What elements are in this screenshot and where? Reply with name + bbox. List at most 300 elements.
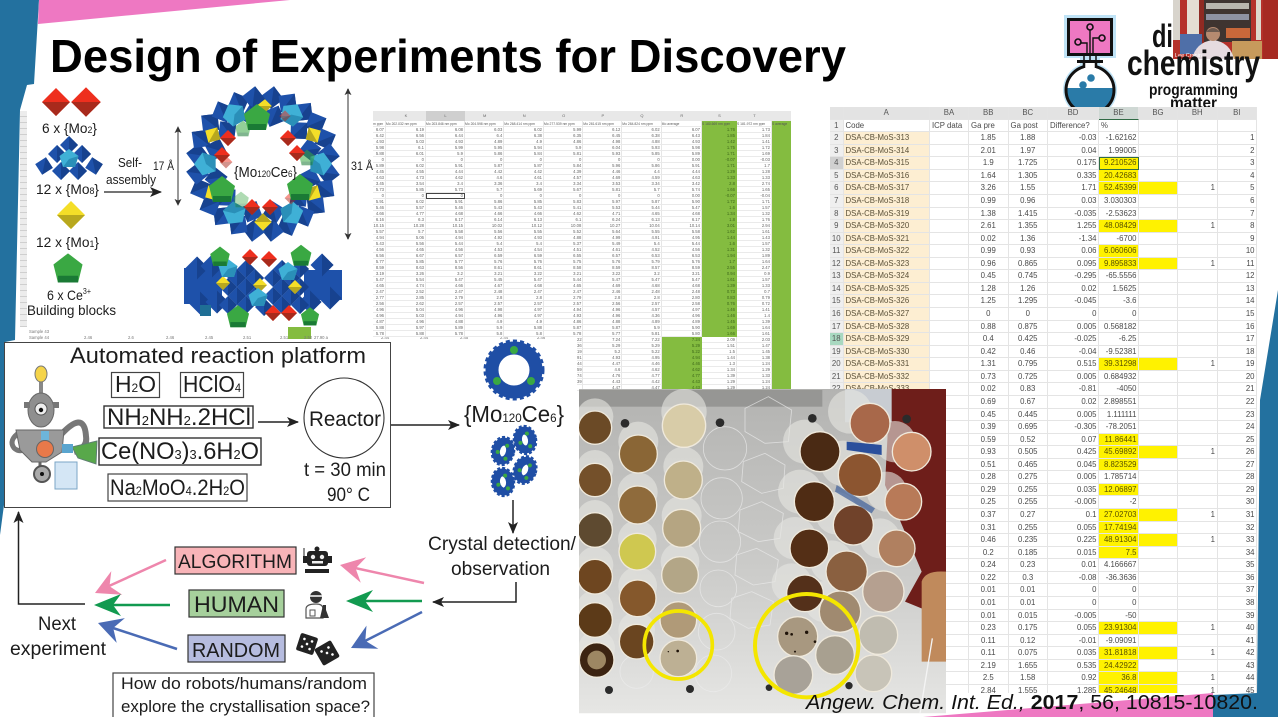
right spreadsheet: Ga pre and post data: 1.26: [1020, 284, 1035, 293]
middle spreadsheet: ppm data: 4.94: [376, 235, 384, 240]
right spreadsheet: Ga pre and post data: 1.85: [981, 133, 996, 142]
middle spreadsheet: ppm data: 6.19: [416, 127, 424, 132]
icon: human scientist: [306, 591, 329, 618]
middle spreadsheet: ppm data: 6.59: [534, 253, 542, 258]
right spreadsheet: Ga pre and post data: -0.005: [1074, 610, 1096, 620]
middle spreadsheet: ppm data: 1.71: [727, 163, 735, 168]
middle spreadsheet: ppm data: 4.77: [416, 211, 424, 216]
middle spreadsheet: ppm data: 1.85: [727, 133, 735, 138]
middle spreadsheet: continuation rows: 7.22: [652, 337, 660, 342]
middle spreadsheet: ppm data: 2.57: [534, 301, 542, 306]
right spreadsheet: Ga pre and post data: 0.22: [981, 573, 996, 582]
middle spreadsheet: ppm data: 0: [500, 157, 502, 162]
middle spreadsheet: ppm data: 5.46: [455, 205, 463, 210]
middle spreadsheet column letters: S: [718, 113, 721, 118]
right spreadsheet: Ga pre and post data: 8.823529: [1104, 460, 1136, 469]
right spreadsheet: Ga pre and post data: Ga pre: [971, 121, 995, 130]
middle spreadsheet: ppm data: 4.57: [652, 307, 660, 312]
right spreadsheet: Ga pre and post data: Code: [846, 121, 864, 130]
middle spreadsheet: ppm data: 4.97: [534, 307, 542, 312]
middle spreadsheet: ppm data: 5.78: [455, 331, 463, 336]
middle spreadsheet: continuation rows: 1.29: [727, 385, 735, 390]
middle spreadsheet: ppm data: 4.56: [376, 247, 384, 252]
middle spreadsheet: ppm data: 4.9: [536, 319, 542, 324]
building block: Mo8: [33, 136, 105, 197]
reactor: Reactor: [309, 408, 381, 431]
middle spreadsheet: ppm data: 5.4: [654, 241, 660, 246]
middle spreadsheet: ppm data: 6.56: [416, 133, 424, 138]
middle spreadsheet: ppm data: 2.8: [654, 295, 660, 300]
middle spreadsheet: ppm data: 1.46: [727, 307, 735, 312]
right spreadsheet: Ga pre and post data: 0.005: [1077, 472, 1096, 481]
right spreadsheet: Ga pre and post data: 0.01: [981, 585, 996, 594]
middle spreadsheet: ppm data: -0.03: [760, 157, 770, 162]
middle spreadsheet: ppm data: 5.73: [376, 187, 384, 192]
middle spreadsheet: ppm data: 6.38: [534, 133, 542, 138]
right spreadsheet: Ga pre and post data: 25: [1246, 435, 1254, 444]
middle spreadsheet: ppm data: 0: [540, 193, 542, 198]
right spreadsheet: Ga pre and post data: 4: [1250, 171, 1254, 180]
middle spreadsheet: ppm data: 4.88: [612, 319, 620, 324]
middle spreadsheet: ppm data: 4.42: [494, 169, 502, 174]
middle spreadsheet: continuation rows: 4.76: [612, 373, 620, 378]
right spreadsheet: Ga pre and post data: DSA-CB-MoS-321: [846, 234, 909, 243]
right spreadsheet: Ga pre and post data: 24: [1246, 422, 1254, 431]
middle spreadsheet: ppm data: 5.81: [652, 331, 660, 336]
middle spreadsheet: ppm data: 5.06: [416, 235, 424, 240]
middle spreadsheet: ppm data: 4.65: [376, 283, 384, 288]
middle spreadsheet: ppm data: 4.95: [692, 235, 700, 240]
middle spreadsheet: ppm data: 3.21: [692, 271, 700, 276]
right spreadsheet: Ga pre and post data: DSA-CB-MoS-314: [846, 146, 909, 155]
right spreadsheet: Ga pre and post data: 0.88: [981, 322, 996, 331]
product formula: {Mo120Ce6}: [464, 401, 564, 427]
right spreadsheet: Ga pre and post data: 0.93: [1020, 246, 1035, 255]
right spreadsheet: Ga pre and post data: 13: [1246, 284, 1254, 293]
middle spreadsheet: ppm data: 4.42: [534, 169, 542, 174]
middle spreadsheet: continuation rows: 5.2: [614, 349, 620, 354]
right spreadsheet: Ga pre and post data: 0: [1132, 585, 1136, 594]
middle spreadsheet: continuation rows: 4.47: [612, 385, 620, 390]
left spreadsheet bottom rows: 27.90 a: [314, 335, 328, 340]
middle spreadsheet: ppm data: 4.46: [612, 169, 620, 174]
middle spreadsheet: ppm data: 5.58: [455, 229, 463, 234]
middle spreadsheet: continuation rows: 4.93: [612, 355, 620, 360]
middle spreadsheet: ppm data: 2.58: [692, 301, 700, 306]
middle spreadsheet: ppm data: 6.16: [376, 217, 384, 222]
middle spreadsheet: ppm data: 0: [579, 157, 581, 162]
middle spreadsheet: ppm data: 4.36: [652, 313, 660, 318]
right spreadsheet: Ga pre and post data: 2.61: [981, 221, 996, 230]
left spreadsheet bottom rows: 2.51: [243, 335, 251, 340]
middle spreadsheet: ppm data: 1.57: [762, 277, 770, 282]
middle spreadsheet: continuation rows: 1.45: [762, 349, 770, 354]
right spreadsheet: Ga pre and post data: 36.8: [1121, 673, 1136, 682]
right spreadsheet: Ga pre and post data: 0.875: [1018, 322, 1038, 331]
right spreadsheet: Ga pre and post data: 0.055: [1077, 523, 1096, 532]
reagent: cerium nitrate: Ce(NO3)3.6H2O: [101, 438, 259, 465]
reagent: sodium molybdate: Na2MoO4.2H2O: [110, 475, 245, 500]
middle spreadsheet: ppm data: 5.47: [692, 277, 700, 282]
right spreadsheet: Ga pre and post data: 5: [1250, 183, 1254, 192]
right spreadsheet: Ga pre and post data: %: [1101, 121, 1108, 130]
left spreadsheet bottom rows: [18, 327, 578, 340]
middle spreadsheet: ppm data: 5.97: [612, 199, 620, 204]
middle spreadsheet: ppm data: 5.7: [496, 187, 502, 192]
right spreadsheet: Ga pre and post data: 1.25: [981, 296, 996, 305]
right spreadsheet: Ga pre and post data: 0: [1092, 309, 1096, 318]
middle spreadsheet: ppm data: 1.39: [727, 283, 735, 288]
arrow: reagents to reactor: [258, 421, 298, 423]
middle spreadsheet: ppm data: 5.47: [534, 277, 542, 282]
right spreadsheet: Ga pre and post data: 16: [832, 309, 841, 318]
right spreadsheet: Ga pre and post data: 0: [1092, 598, 1096, 607]
right spreadsheet: Ga pre and post data: 0.92: [1081, 673, 1096, 682]
right spreadsheet: Ga pre and post data: -0.005: [1074, 497, 1096, 506]
decision maker: human: HUMAN: [194, 592, 279, 617]
middle spreadsheet: ppm data: 5.9: [496, 325, 502, 330]
right spreadsheet: Ga pre and post data: 17: [832, 322, 841, 331]
right spreadsheet: Ga pre and post data: 19: [1246, 359, 1254, 368]
middle spreadsheet: ppm data: 2.46: [612, 289, 620, 294]
middle spreadsheet: ppm data: 4.94: [455, 313, 463, 318]
middle spreadsheet: ppm data: 10.02: [492, 223, 502, 228]
middle spreadsheet: ppm data: 6.55: [573, 253, 581, 258]
research question box: explore the crystallisation space?: [121, 698, 370, 716]
right spreadsheet: Ga pre and post data: 0.51: [981, 460, 996, 469]
middle spreadsheet: ppm data: 1.72: [762, 145, 770, 150]
right spreadsheet: Ga pre and post data: DSA-CB-MoS-330: [846, 347, 909, 356]
middle spreadsheet: ppm data: 6.1: [575, 217, 581, 222]
right spreadsheet: Ga pre and post data: 0.02: [1081, 397, 1096, 406]
middle spreadsheet: ppm data: 4.44: [455, 169, 463, 174]
middle spreadsheet: ppm data: 2.48: [494, 289, 502, 294]
middle spreadsheet: ppm data: 5.90: [692, 199, 700, 204]
middle spreadsheet: ppm data: 2.55: [727, 265, 735, 270]
right spreadsheet: Ga pre and post data: -6700: [1117, 234, 1136, 243]
middle spreadsheet: continuation rows: 44: [577, 361, 582, 366]
middle spreadsheet: ppm data: 4.93: [573, 313, 581, 318]
middle spreadsheet: ppm data: 4.87: [376, 319, 384, 324]
middle spreadsheet: ppm data: 5.91: [376, 199, 384, 204]
right spreadsheet: Ga pre and post data: BC: [1022, 108, 1033, 117]
middle spreadsheet: ppm data: 5.55: [652, 229, 660, 234]
middle spreadsheet: ppm data: 5.98: [376, 145, 384, 150]
middle spreadsheet: ppm data: 5.89: [692, 151, 700, 156]
middle spreadsheet: ppm data: 4.61: [612, 247, 620, 252]
middle spreadsheet: ppm data: 0: [657, 157, 660, 162]
middle spreadsheet: ppm data: 5.87: [534, 163, 542, 168]
middle spreadsheet: ppm data: 4.86: [573, 139, 581, 144]
middle spreadsheet: ppm data: 5.86: [494, 151, 502, 156]
middle spreadsheet: ppm data: 5.56: [494, 229, 502, 234]
middle spreadsheet: ppm data: 1.66: [727, 331, 735, 336]
right spreadsheet: Ga pre and post data: 16: [1246, 322, 1254, 331]
right spreadsheet: Ga pre and post data: [830, 107, 1257, 693]
middle spreadsheet: ppm data: 4.96: [612, 313, 620, 318]
right spreadsheet: Ga pre and post data: 1: [1211, 359, 1215, 368]
middle spreadsheet: ppm data: 2.8: [536, 295, 542, 300]
right spreadsheet: Ga pre and post data: 27.02703: [1104, 510, 1136, 519]
citation: Angew. Chem. Int. Ed., 2017, 56, 10815-10820.: [805, 692, 1258, 714]
middle spreadsheet: ppm data: 5.43: [376, 241, 384, 246]
middle spreadsheet: ppm data: Mo 281.615 nm ppm: [583, 122, 614, 126]
right spreadsheet: Ga pre and post data: 2.5: [983, 673, 994, 682]
middle spreadsheet: ppm data: 4.96: [612, 307, 620, 312]
middle spreadsheet: ppm data: 6.03: [494, 127, 502, 132]
building block: Ce: 3+: [83, 287, 91, 296]
middle spreadsheet: ppm data: 4.66: [455, 283, 463, 288]
middle spreadsheet: ppm data: 4.39: [573, 169, 581, 174]
middle spreadsheet: continuation rows: 19: [577, 349, 582, 354]
arrow: reactor to product: [391, 424, 459, 426]
next experiment label: experiment: [10, 639, 107, 660]
middle spreadsheet: ppm data: 4.65: [652, 211, 660, 216]
middle spreadsheet: ppm data: 1.45: [727, 319, 735, 324]
right spreadsheet: Ga pre and post data: 1.55: [1020, 183, 1035, 192]
top pink band: [38, 0, 290, 24]
right spreadsheet: Ga pre and post data: DSA-CB-MoS-318: [846, 196, 909, 205]
right spreadsheet: Ga pre and post data: 8: [834, 208, 838, 218]
middle spreadsheet: ppm data: 4.54: [534, 247, 542, 252]
middle spreadsheet: ppm data: 1.71: [762, 199, 770, 204]
right spreadsheet: Ga pre and post data: 2: [1250, 146, 1254, 155]
middle spreadsheet column letters: M: [483, 113, 486, 118]
middle spreadsheet: ppm data: 1.29: [727, 169, 735, 174]
middle spreadsheet: ppm data: 5.76: [612, 259, 620, 264]
middle spreadsheet: ppm data: 3.22: [534, 271, 542, 276]
vial glass bodies: [579, 389, 913, 638]
reagent: H2O: H2O: [115, 371, 156, 397]
middle spreadsheet: ppm data: 5.94: [534, 145, 542, 150]
middle spreadsheet: ppm data: 3.34: [652, 181, 660, 186]
product ring small: [486, 342, 542, 398]
right spreadsheet: Ga pre and post data: -0.03: [1079, 133, 1096, 142]
right spreadsheet: Ga pre and post data: Difference?: [1050, 121, 1090, 130]
middle spreadsheet: ppm data: 5.4: [536, 241, 542, 246]
middle spreadsheet: ppm data: 5.74: [692, 187, 700, 192]
right spreadsheet: Ga pre and post data: 0.1: [1086, 510, 1096, 519]
right spreadsheet: Ga pre and post data: 1.355: [1018, 221, 1038, 230]
right spreadsheet: Ga pre and post data: 1.725: [1018, 158, 1038, 167]
panel: automated reaction platform: [4, 342, 390, 508]
right spreadsheet: Ga pre and post data: 0.175: [1077, 158, 1096, 167]
right spreadsheet: Ga pre and post data: 3: [1250, 158, 1254, 167]
middle spreadsheet: ppm data: 4.53: [494, 247, 502, 252]
middle spreadsheet: ppm data: 5.83: [573, 199, 581, 204]
middle spreadsheet: ppm data: Mo average: [662, 122, 679, 126]
middle spreadsheet: ppm data: 2.80: [692, 295, 700, 300]
building block: Mo1: [36, 201, 99, 250]
right spreadsheet: Ga pre and post data: 0.425: [1018, 334, 1038, 343]
logo text: matter: [1170, 95, 1217, 112]
middle spreadsheet: ppm data: 8.63: [416, 265, 424, 270]
right spreadsheet: Ga pre and post data: 0.24: [981, 560, 996, 569]
right spreadsheet: Ga pre and post data: 0.175: [1018, 623, 1038, 632]
right spreadsheet: Ga pre and post data: -0.81: [1079, 384, 1096, 393]
right spreadsheet: Ga pre and post data: 0.795: [1018, 359, 1038, 368]
middle spreadsheet: ppm data: 3.54: [416, 181, 424, 186]
middle spreadsheet: ppm data: 1.57: [762, 241, 770, 246]
right spreadsheet: Ga pre and post data: 1.64: [981, 171, 996, 180]
middle spreadsheet: ppm data: 8.59: [376, 265, 384, 270]
right spreadsheet: Ga pre and post data: 0.005: [1077, 410, 1096, 418]
left spreadsheet bottom rows: Sample 43: [29, 329, 49, 334]
middle spreadsheet: ppm data: 4.71: [612, 211, 620, 216]
middle spreadsheet: ppm data: 5.78: [573, 331, 581, 336]
middle spreadsheet: ppm data: 4.97: [534, 313, 542, 318]
middle spreadsheet: ppm data: 2.47: [573, 289, 581, 294]
middle spreadsheet: ppm data: 1.6: [729, 241, 735, 246]
crystals cluster: [489, 424, 540, 497]
icon: dice: [296, 633, 340, 666]
right spreadsheet: Ga pre and post data: 39: [1246, 610, 1254, 620]
left spreadsheet bottom rows: Sample 44: [29, 335, 49, 340]
right spreadsheet: Ga pre and post data: 15: [1246, 309, 1254, 318]
middle spreadsheet: ppm data: 6.44: [455, 133, 463, 138]
middle spreadsheet: continuation rows: 4.47: [652, 385, 660, 390]
right spreadsheet: Ga pre and post data: 1.28: [981, 284, 996, 293]
middle spreadsheet: ppm data: 1.28: [762, 169, 770, 174]
right spreadsheet: Ga pre and post data: 1: [1250, 133, 1254, 142]
middle spreadsheet: ppm data: 2.56: [612, 301, 620, 306]
middle spreadsheet: ppm data: 6.56: [376, 253, 384, 258]
right spreadsheet: Ga pre and post data: 48.91304: [1104, 535, 1136, 544]
middle spreadsheet: ppm data: 3.01: [727, 223, 735, 228]
middle spreadsheet: ppm data: 1.41: [762, 139, 770, 144]
left blue band: [0, 0, 39, 535]
middle spreadsheet: continuation rows: 1.38: [762, 355, 770, 360]
right spreadsheet: Ga pre and post data: 3: [834, 146, 838, 155]
right spreadsheet: Ga pre and post data: 0.225: [1077, 535, 1096, 544]
middle spreadsheet: ppm data: 5.57: [416, 205, 424, 210]
right spreadsheet: Ga pre and post data: DSA-CB-MoS-324: [846, 271, 909, 280]
right spreadsheet: Ga pre and post data: 0.725: [1018, 372, 1038, 381]
right spreadsheet: Ga pre and post data: 38: [1246, 598, 1254, 607]
middle spreadsheet column letters: T: [753, 113, 756, 118]
middle spreadsheet: ppm data: Mo 268.414 nm ppm: [504, 122, 535, 126]
right spreadsheet: Ga pre and post data: 6.060606: [1104, 246, 1136, 255]
middle spreadsheet: continuation rows: 1.47: [762, 343, 770, 348]
middle spreadsheet: ppm data: 5.9: [575, 145, 581, 150]
right spreadsheet: Ga pre and post data: 48.08429: [1104, 221, 1136, 230]
arrow: green incoming: [346, 590, 422, 612]
middle spreadsheet: ppm data: 4.96: [416, 319, 424, 324]
middle spreadsheet: ppm data: 0: [422, 157, 424, 162]
right spreadsheet: Ga pre and post data: -0.08: [1079, 573, 1096, 582]
right spreadsheet: Ga pre and post data: 0.46: [1020, 347, 1035, 356]
right spreadsheet: Ga pre and post data: 0.46: [981, 535, 996, 544]
middle spreadsheet: ppm data: 5.76: [494, 259, 502, 264]
middle spreadsheet: ppm data: 0: [500, 193, 502, 198]
middle spreadsheet: ppm data: 1.33: [727, 175, 735, 180]
middle spreadsheet: ppm data: 5.85: [416, 187, 424, 192]
middle spreadsheet: continuation rows: 1.44: [727, 355, 735, 360]
middle spreadsheet: ppm data: 6.67: [416, 253, 424, 258]
right spreadsheet: Ga pre and post data: 13: [832, 271, 841, 280]
middle spreadsheet: ppm data: 4.56: [692, 247, 700, 252]
right spreadsheet: Ga pre and post data: 0.27: [1020, 510, 1035, 519]
middle spreadsheet: ppm data: 3.45: [376, 181, 384, 186]
middle spreadsheet: continuation rows: 1.3: [729, 361, 735, 366]
right spreadsheet: Ga pre and post data: 0.005: [1077, 322, 1096, 331]
right spreadsheet: Ga pre and post data: 0.01: [981, 598, 996, 607]
middle spreadsheet: ppm data: 2.79: [573, 295, 581, 300]
right spreadsheet: Ga pre and post data: 2: [834, 133, 838, 142]
middle spreadsheet: ppm data: 4.9: [536, 139, 542, 144]
right spreadsheet: Ga pre and post data: -0.035: [1074, 208, 1096, 218]
middle spreadsheet: ppm data: 1.69: [762, 151, 770, 156]
middle spreadsheet: ppm data: 0: [422, 193, 424, 198]
elbow arrow: detection to decision: [433, 582, 516, 602]
middle spreadsheet: ppm data: 6.57: [612, 253, 620, 258]
middle spreadsheet: ppm data: 1.32: [762, 247, 770, 252]
middle spreadsheet: ppm data: 6.59: [494, 253, 502, 258]
right spreadsheet: Ga pre and post data: 0.035: [1077, 648, 1096, 657]
middle spreadsheet: ppm data: 5.87: [573, 325, 581, 330]
middle spreadsheet: ppm data: 1.64: [762, 259, 770, 264]
middle spreadsheet: ppm data: 4.96: [455, 307, 463, 312]
middle spreadsheet: ppm data: 1.73: [762, 127, 770, 132]
right spreadsheet: Ga pre and post data: 1.785714: [1104, 472, 1136, 481]
logo text: di: [1152, 18, 1173, 54]
middle spreadsheet: ppm data: 1.61: [762, 229, 770, 234]
right spreadsheet: Ga pre and post data: -50: [1125, 610, 1136, 620]
middle spreadsheet: ppm data: S 181.972 nm ppm: [737, 122, 765, 126]
dimension: 17 angstrom: [153, 127, 178, 205]
right spreadsheet: Ga pre and post data: 1.99005: [1108, 146, 1136, 155]
middle spreadsheet: continuation rows: 22: [577, 337, 582, 342]
middle spreadsheet: ppm data: 1.76: [762, 217, 770, 222]
middle spreadsheet: ppm data: 4.94: [573, 307, 581, 312]
right spreadsheet: Ga pre and post data: 2.01: [981, 146, 996, 155]
middle spreadsheet: ppm data: 1.8: [729, 217, 735, 222]
building block: Mo2: 6 x {Mo2}: [42, 120, 97, 136]
middle spreadsheet: ppm data: 2.47: [534, 289, 542, 294]
middle spreadsheet: ppm data: 5.54: [416, 277, 424, 282]
middle spreadsheet: ppm data: 5.41: [573, 205, 581, 210]
middle spreadsheet: ppm data: 1.76: [727, 127, 735, 132]
right spreadsheet: Ga pre and post data: BD: [1068, 108, 1078, 117]
middle spreadsheet: ppm data: 5.73: [455, 187, 463, 192]
right spreadsheet: Ga pre and post data: 0.23: [1020, 560, 1035, 569]
right spreadsheet: Ga pre and post data: 21: [832, 372, 841, 381]
middle spreadsheet: ppm data: 4.55: [416, 169, 424, 174]
middle spreadsheet: ppm data: 4.86: [573, 319, 581, 324]
middle spreadsheet: ppm data: 4.68: [455, 211, 463, 216]
middle spreadsheet: ppm data: 5.84: [534, 151, 542, 156]
icon: robot: [303, 546, 332, 573]
middle spreadsheet: ppm data: 0: [461, 157, 463, 162]
right spreadsheet: Ga pre and post data: 41: [1246, 636, 1254, 645]
right spreadsheet: Ga pre and post data: 0.568182: [1104, 322, 1136, 331]
middle spreadsheet: ppm data: 6.07: [376, 127, 384, 132]
middle spreadsheet: ppm data: 5.49: [612, 241, 620, 246]
middle spreadsheet: ppm data: 6.35: [573, 133, 581, 138]
middle spreadsheet: ppm data: 2.57: [573, 301, 581, 306]
middle spreadsheet: ppm data: 1.65: [762, 187, 770, 192]
middle spreadsheet: ppm data: 5.78: [376, 331, 384, 336]
right spreadsheet: Ga pre and post data: 1: [1211, 221, 1215, 230]
right spreadsheet: Ga pre and post data: 1.58: [1020, 673, 1035, 682]
middle spreadsheet: ppm data: 10.15: [374, 223, 384, 228]
right spreadsheet: Ga pre and post data: -0.025: [1074, 334, 1096, 343]
right spreadsheet: Ga pre and post data: 12: [1246, 271, 1254, 280]
middle spreadsheet: ppm data: 8.58: [573, 265, 581, 270]
middle spreadsheet: ppm data: 4.96: [376, 307, 384, 312]
middle spreadsheet: continuation rows: 5.29: [612, 343, 620, 348]
logo text: [1127, 18, 1260, 112]
